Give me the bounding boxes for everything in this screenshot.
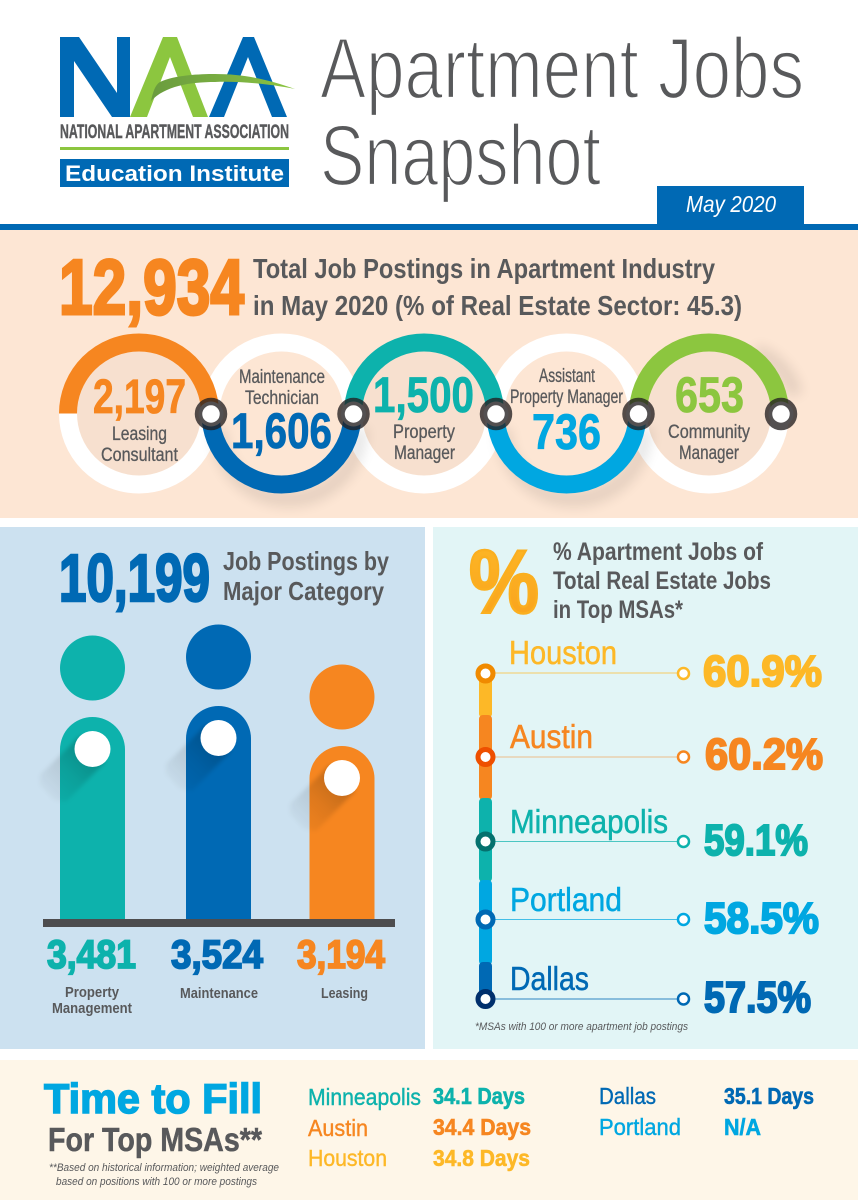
value: property management: [47, 933, 136, 1017]
category heading: [223, 546, 389, 606]
time to fill: second column: 35.1 Days: [724, 1083, 814, 1109]
chain of job rings: [68, 342, 795, 499]
figure: property management: [40, 636, 125, 920]
value: property management: Property: [65, 984, 120, 1001]
ring connector knobs: [198, 402, 794, 426]
value: maintenance: Maintenance: [180, 985, 258, 1002]
ring: community manager: [638, 342, 780, 414]
stat: community manager: 653: [675, 367, 744, 423]
time to fill: first column: 34.1 Days: [433, 1083, 525, 1109]
baseline: [43, 919, 395, 927]
time to fill: second column: N/A: [724, 1114, 761, 1140]
timeline spine: [479, 665, 492, 1004]
title: [320, 21, 804, 204]
stat: property manager: Manager: [394, 443, 456, 464]
total postings description: [253, 253, 742, 321]
category total number: 10,199: [59, 541, 210, 616]
row: Austin: Austin: [510, 718, 593, 755]
value: maintenance: [171, 933, 264, 1002]
date badge: [657, 186, 804, 224]
row: Houston: 60.9%: [703, 647, 822, 696]
value: leasing: Leasing: [321, 985, 368, 1002]
time to fill: second column: Dallas: [599, 1083, 656, 1109]
logo: NAA Education Institute: Education Institute: [65, 161, 284, 186]
stat: maintenance technician: Maintenance: [239, 367, 325, 388]
time to fill footnote: **Based on historical information; weighted average: [49, 1162, 279, 1174]
stat: leasing consultant: Leasing: [112, 424, 167, 445]
row: Dallas: [478, 960, 811, 1022]
stat: assistant property manager: Assistant: [539, 366, 596, 387]
stat: leasing consultant: Consultant: [101, 445, 179, 466]
panel: total job postings: [0, 230, 858, 518]
ring: leasing consultant: [68, 342, 210, 414]
stat: community manager: [668, 367, 750, 464]
value: property management: 3,481: [47, 933, 136, 977]
time to fill: first column: Houston: [308, 1145, 387, 1171]
stat: assistant property manager: [510, 366, 623, 460]
figure: maintenance: [166, 624, 251, 920]
header: [0, 0, 858, 224]
time to fill: first column: 34.4 Days: [433, 1114, 531, 1140]
time to fill heading: For Top MSAs**: [48, 1121, 262, 1158]
MSA heading: Total Real Estate Jobs: [553, 567, 771, 595]
ring: assistant property manager: [496, 414, 638, 484]
value: leasing: 3,194: [297, 933, 386, 977]
row: Minneapolis: [478, 803, 808, 865]
total postings description: in May 2020 (% of Real Estate Sector: 45.3): [253, 290, 742, 321]
stat: property manager: Property: [393, 422, 455, 443]
ring: property manager: [353, 342, 495, 414]
total postings description: Total Job Postings in Apartment Industry: [253, 253, 715, 284]
panel: time to fill: [0, 1060, 858, 1200]
MSA heading: % Apartment Jobs of: [553, 538, 764, 566]
total postings number: 12,934: [59, 243, 244, 331]
stat: assistant property manager: Property Manager: [510, 387, 623, 408]
logo: NAA Education Institute: NATIONAL APARTMENT ASSOCIATION: [60, 122, 289, 143]
stat: community manager: Manager: [679, 443, 740, 464]
row: Houston: Houston: [509, 634, 617, 671]
MSA heading: [553, 538, 771, 624]
row: Dallas: 57.5%: [704, 973, 811, 1022]
stat: property manager: [373, 367, 474, 464]
value: leasing: [297, 933, 386, 1002]
icon: percent sign: %: [469, 533, 539, 633]
time to fill heading: [44, 1075, 262, 1158]
row: Austin: [478, 718, 823, 779]
row: Dallas: Dallas: [510, 960, 589, 997]
time to fill heading: Time to Fill: [44, 1075, 262, 1122]
stat: maintenance technician: Technician: [245, 388, 319, 409]
row: Portland: 58.5%: [704, 894, 819, 943]
value: maintenance: 3,524: [171, 933, 264, 977]
stat: leasing consultant: [93, 371, 186, 466]
row: Minneapolis: 59.1%: [704, 816, 808, 865]
footnote: *MSAs with 100 or more apartment job postings: [475, 1021, 688, 1033]
row: Austin: 60.2%: [705, 730, 823, 779]
category heading: Job Postings by: [223, 546, 389, 576]
stat: maintenance technician: 1,606: [231, 403, 332, 459]
time to fill footnote: based on positions with 100 or more postings: [56, 1176, 257, 1188]
row: Portland: [478, 881, 819, 943]
time to fill: first column: Minneapolis: [308, 1084, 421, 1110]
row: Minneapolis: Minneapolis: [510, 803, 668, 840]
stat: property manager: 1,500: [373, 367, 474, 423]
pictogram bar chart: [40, 624, 395, 1017]
title: Snapshot: [320, 108, 601, 204]
time to fill footnote: [49, 1162, 279, 1188]
ring: maintenance technician: [210, 414, 352, 484]
soft shading inside rings: [77, 352, 771, 476]
time to fill: second column: Portland: [599, 1114, 681, 1140]
date badge: May 2020: [686, 191, 776, 217]
stat: assistant property manager: 736: [532, 404, 601, 460]
MSA heading: in Top MSAs*: [553, 596, 683, 624]
panel: job postings by major category: [0, 527, 425, 1049]
stat: community manager: Community: [668, 422, 750, 443]
time to fill: first column: 34.8 Days: [433, 1145, 530, 1171]
panel: percent of real estate jobs by MSA: [433, 527, 858, 1049]
figure: leasing: [290, 664, 374, 920]
row: Portland: Portland: [510, 881, 622, 918]
logo: NAA Education Institute: [60, 37, 295, 187]
time to fill: first column: [308, 1083, 531, 1171]
stat: maintenance technician: [231, 367, 332, 459]
row: Houston: [478, 634, 822, 696]
stat: leasing consultant: 2,197: [93, 371, 186, 424]
value: property management: Management: [52, 1000, 132, 1017]
time to fill: second column: [599, 1083, 814, 1140]
time to fill: first column: Austin: [308, 1115, 368, 1141]
category heading: Major Category: [223, 576, 384, 606]
